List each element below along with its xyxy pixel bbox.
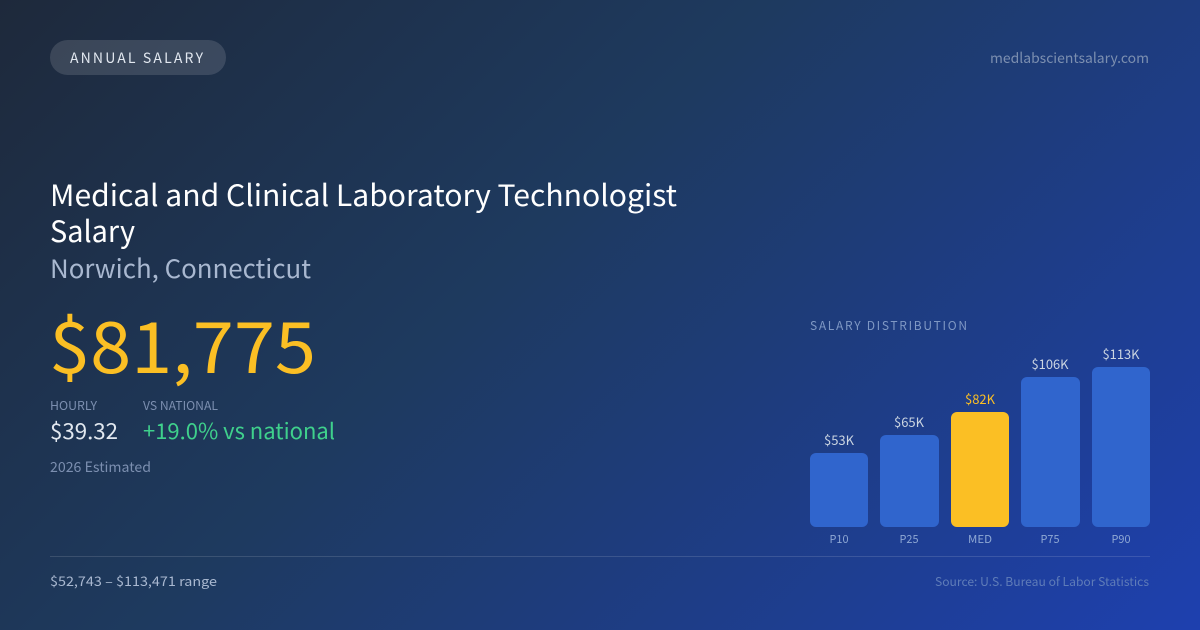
stat: hourly: HOURLY	[50, 397, 98, 414]
bar: P10: $53K	[824, 430, 855, 449]
bar: P75: $106K	[1032, 354, 1069, 373]
site url: medlabscientsalary.com	[990, 48, 1149, 68]
bar: median: $82K	[965, 389, 996, 408]
title: Salary	[50, 209, 135, 251]
data year note: 2026 Estimated	[50, 457, 151, 477]
stat: hourly	[50, 397, 118, 446]
bar: P10: P10	[830, 531, 848, 547]
median annual salary: $81,775	[49, 292, 316, 394]
bar: P75	[1021, 354, 1080, 547]
title	[50, 173, 677, 251]
bar: P25: $65K	[894, 412, 925, 431]
title: Medical and Clinical Laboratory Technologist	[50, 173, 677, 215]
stat: vs national	[143, 397, 335, 446]
bar: P25: P25	[900, 531, 918, 547]
chart heading: SALARY DISTRIBUTION	[810, 317, 967, 334]
salary range: $52,743 – $113,471 range	[50, 571, 217, 590]
source note: Source: U.S. Bureau of Labor Statistics	[935, 573, 1149, 590]
badge: annual salary: ANNUAL SALARY	[70, 48, 204, 68]
bar: median: MED	[968, 531, 992, 547]
stat: vs national: VS NATIONAL	[143, 397, 218, 414]
bar: P10	[810, 430, 868, 547]
stat: hourly: $39.32	[50, 414, 118, 446]
bar: P90: P90	[1112, 531, 1130, 547]
badge: annual salary	[50, 40, 226, 75]
subtitle: location: Norwich, Connecticut	[50, 249, 311, 286]
bar: median	[951, 389, 1009, 547]
bar: P90: $113K	[1102, 344, 1140, 363]
stat: vs national: +19.0% vs national	[143, 414, 335, 446]
bar chart: salary distribution	[810, 344, 1150, 547]
bar: P90	[1092, 344, 1150, 547]
bar: P25	[880, 412, 939, 547]
bar: P75: P75	[1040, 531, 1060, 547]
